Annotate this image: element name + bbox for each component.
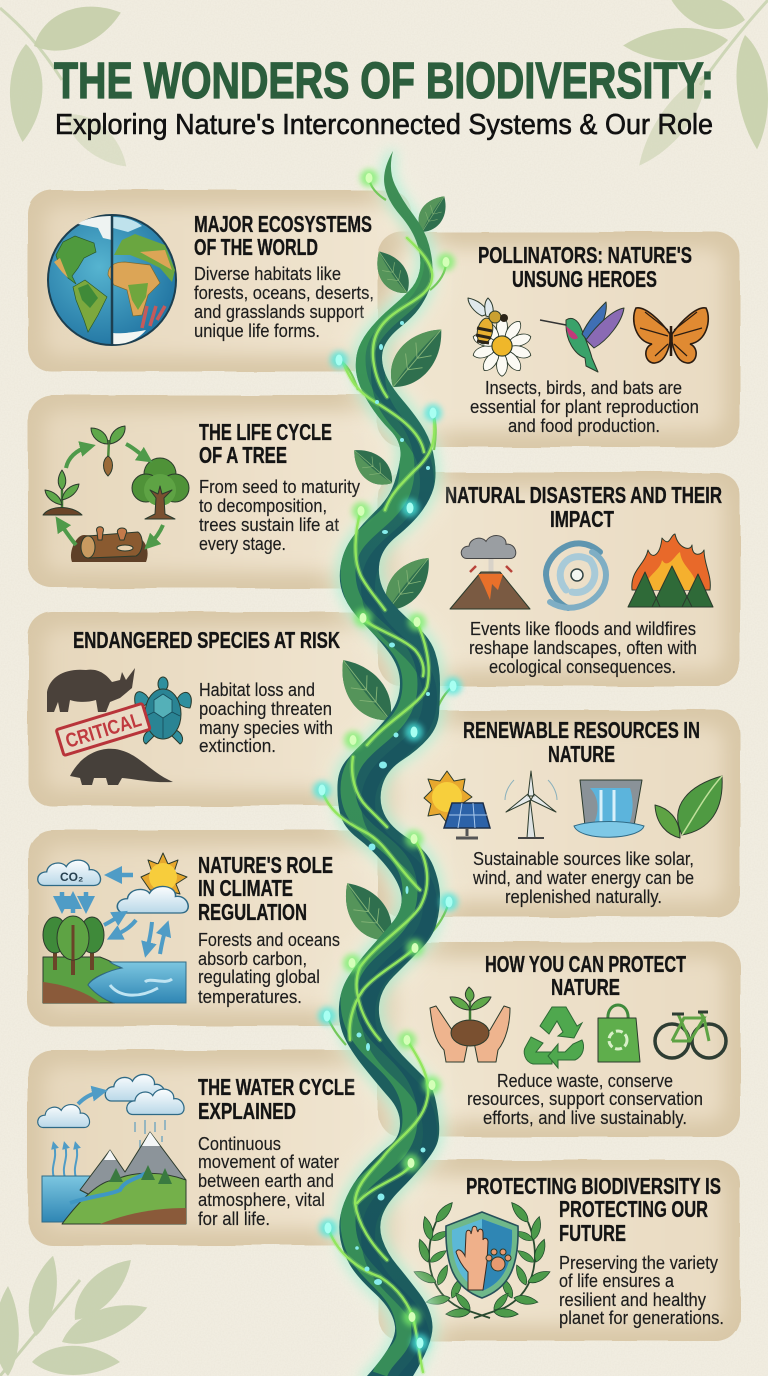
body text bbox=[198, 930, 340, 1007]
body text: absorb carbon, bbox=[198, 949, 307, 969]
icon: wind turbine bbox=[505, 771, 557, 838]
subtitle: Exploring Nature's Interconnected Systems & Our Role bbox=[55, 109, 713, 141]
panel: pollinators bbox=[378, 232, 740, 447]
body text: trees sustain life at bbox=[199, 515, 339, 535]
body text: unique life forms. bbox=[194, 321, 320, 341]
icon: water cycle diagram bbox=[38, 1074, 186, 1224]
icon: hydro dam bbox=[574, 780, 644, 837]
icon: bicycle bbox=[655, 1012, 726, 1058]
panel: water cycle bbox=[28, 1050, 412, 1245]
decorative leaves: top left bbox=[0, 0, 136, 176]
stem shading strands bbox=[348, 259, 437, 1376]
decorative leaves: top right bbox=[622, 0, 768, 175]
heading: UNSUNG HEROES bbox=[512, 266, 657, 292]
body text: ecological consequences. bbox=[489, 657, 676, 677]
body text: Forests and oceans bbox=[198, 930, 340, 950]
body text: and food production. bbox=[508, 416, 660, 436]
body text bbox=[469, 619, 697, 677]
icon: rhino bbox=[47, 668, 135, 712]
body text: many species with bbox=[199, 718, 333, 738]
body text: Insects, birds, and bats are bbox=[485, 378, 682, 398]
icon: hands holding seedling bbox=[430, 987, 510, 1062]
heading bbox=[198, 1074, 355, 1124]
body text: Diverse habitats like bbox=[194, 264, 341, 284]
body text: replenished naturally. bbox=[505, 887, 662, 907]
body text: Sustainable sources like solar, bbox=[473, 849, 694, 869]
icon: hurricane bbox=[546, 543, 606, 608]
heading: NATURE'S ROLE bbox=[198, 852, 333, 878]
icon: tree life cycle bbox=[43, 426, 189, 562]
icon: pangolin bbox=[70, 749, 173, 785]
body text bbox=[470, 378, 699, 436]
panel: life cycle of a tree bbox=[28, 395, 412, 588]
panel: climate regulation bbox=[28, 830, 412, 1026]
heading: OF A TREE bbox=[199, 442, 287, 468]
icon: recycle symbol bbox=[524, 1007, 584, 1068]
body text bbox=[467, 1071, 703, 1128]
body text bbox=[559, 1253, 724, 1328]
side branches bbox=[327, 178, 453, 1045]
icon: bee on daisy bbox=[468, 298, 532, 376]
panel: major ecosystems bbox=[28, 190, 412, 372]
icon: hummingbird bbox=[540, 302, 624, 372]
heading bbox=[466, 1173, 721, 1246]
heading bbox=[199, 419, 332, 468]
body text: reshape landscapes, often with bbox=[469, 638, 697, 658]
title bbox=[54, 52, 714, 141]
icon: reusable green bag bbox=[598, 1005, 640, 1062]
body text: efforts, and live sustainably. bbox=[483, 1108, 687, 1128]
vine leaves bbox=[328, 190, 454, 952]
panel: protecting biodiversity bbox=[378, 1160, 740, 1341]
heading: THE WATER CYCLE bbox=[198, 1074, 355, 1100]
body text: planet for generations. bbox=[559, 1308, 724, 1328]
body text bbox=[199, 477, 360, 554]
body text: Reduce waste, conserve bbox=[497, 1071, 673, 1091]
body text: forests, oceans, deserts, bbox=[194, 283, 374, 303]
heading: NATURE bbox=[548, 741, 615, 767]
glowing buds bbox=[313, 169, 462, 1352]
body text: resources, support conservation bbox=[467, 1089, 703, 1109]
panel: how you can protect nature bbox=[378, 942, 740, 1137]
icon: sun and solar panel bbox=[424, 771, 490, 838]
body text bbox=[199, 680, 333, 756]
icon: critical stamp: CRITICAL bbox=[63, 709, 144, 753]
body text: Habitat loss and bbox=[199, 680, 315, 700]
icon: volcano bbox=[450, 536, 530, 609]
body text: atmosphere, vital bbox=[198, 1190, 325, 1210]
body text bbox=[194, 264, 374, 341]
panel: endangered species bbox=[28, 612, 412, 806]
heading bbox=[194, 211, 372, 260]
stem ribbon bbox=[337, 151, 440, 1376]
icon: butterfly bbox=[634, 308, 708, 363]
body text: to decomposition, bbox=[199, 496, 327, 516]
heading: THE LIFE CYCLE bbox=[199, 419, 332, 445]
heading bbox=[198, 852, 333, 925]
body text: poaching threaten bbox=[199, 699, 332, 719]
heading: HOW YOU CAN PROTECT bbox=[485, 951, 686, 977]
panel: renewable resources bbox=[378, 710, 740, 917]
body text: Continuous bbox=[198, 1134, 281, 1154]
body text: of life ensures a bbox=[559, 1271, 675, 1291]
body text: extinction. bbox=[199, 736, 276, 756]
vine glow bbox=[337, 151, 440, 1376]
body text: wind, and water energy can be bbox=[472, 868, 694, 888]
body text: Events like floods and wildfires bbox=[470, 619, 696, 639]
body text bbox=[198, 1134, 339, 1229]
body text: every stage. bbox=[199, 534, 286, 554]
heading bbox=[485, 951, 686, 1000]
icon: climate diagram: CO₂ bbox=[60, 870, 83, 884]
heading: IMPACT bbox=[550, 506, 614, 532]
body text: between earth and bbox=[198, 1171, 334, 1191]
heading: OF THE WORLD bbox=[194, 234, 318, 260]
heading: FUTURE bbox=[559, 1220, 626, 1246]
body text: regulating global bbox=[198, 967, 320, 987]
body text: From seed to maturity bbox=[199, 477, 360, 497]
decorative leaves: bottom left bbox=[0, 1249, 152, 1376]
heading: MAJOR ECOSYSTEMS bbox=[194, 211, 372, 237]
icon: turtle bbox=[135, 677, 191, 744]
body text: essential for plant reproduction bbox=[470, 397, 699, 417]
body text: movement of water bbox=[198, 1152, 339, 1172]
body text: temperatures. bbox=[198, 987, 302, 1007]
body text: for all life. bbox=[198, 1209, 270, 1229]
body text: resilient and healthy bbox=[559, 1290, 706, 1310]
heading: ENDANGERED SPECIES AT RISK bbox=[73, 627, 340, 653]
heading: PROTECTING OUR bbox=[559, 1196, 708, 1222]
heading bbox=[445, 482, 722, 532]
panel: natural disasters bbox=[378, 472, 740, 686]
icon: climate diagram bbox=[38, 853, 188, 1003]
heading: POLLINATORS: NATURE'S bbox=[478, 242, 692, 268]
icon: forest fire bbox=[628, 534, 713, 607]
icon: globe bbox=[48, 215, 176, 345]
heading: REGULATION bbox=[198, 899, 307, 925]
central vine bbox=[313, 151, 462, 1376]
bright tendrils bbox=[322, 238, 434, 1372]
heading bbox=[463, 717, 700, 767]
icon: green leaves bbox=[655, 776, 722, 838]
heading: NATURE bbox=[551, 974, 620, 1000]
heading bbox=[478, 242, 692, 292]
body text: Preserving the variety bbox=[559, 1253, 718, 1273]
heading: IN CLIMATE bbox=[198, 875, 293, 901]
icon: shield with laurel bbox=[412, 1200, 552, 1318]
small cyan dots bbox=[355, 321, 430, 1285]
heading: EXPLAINED bbox=[198, 1098, 296, 1124]
body text: and grasslands support bbox=[194, 302, 364, 322]
body text bbox=[472, 849, 694, 907]
